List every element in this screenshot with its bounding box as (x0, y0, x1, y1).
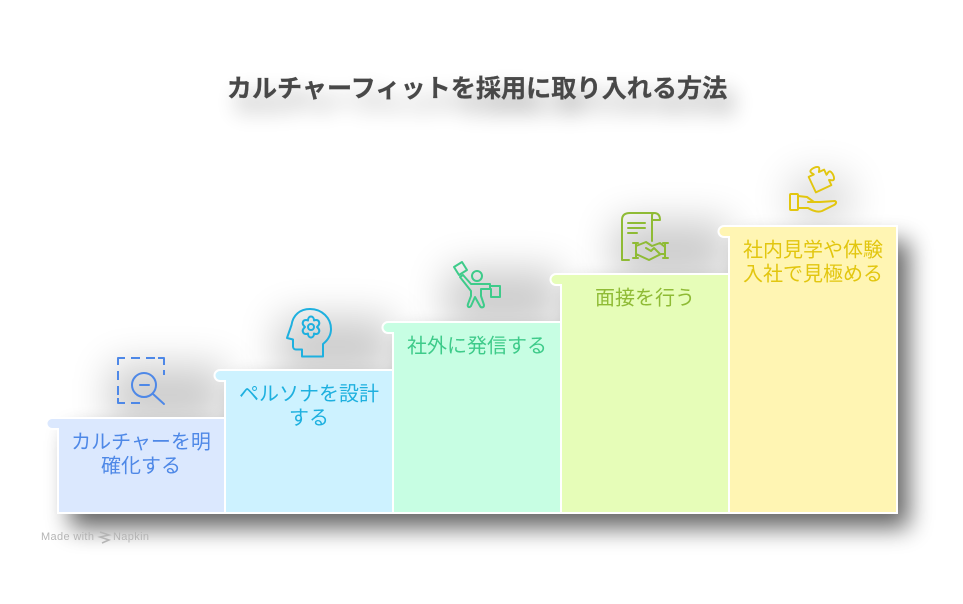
icon: dashed frame with magnifier (118, 358, 164, 404)
step 1 panel (47, 418, 225, 513)
icon: person with papers (454, 262, 500, 307)
step 1 label: 確化する (101, 454, 181, 478)
step 2 label: ペルソナを設計 (239, 382, 379, 406)
step 5 panel (718, 226, 897, 513)
icon: Napkin logo (100, 532, 109, 543)
watermark: Made with Napkin: Made with (41, 531, 94, 543)
icon: head with gear (287, 309, 331, 356)
step 4 panel (550, 274, 729, 513)
icon: contract scroll with handshake (622, 213, 668, 260)
staircase and icon shadows (70, 175, 909, 528)
step 3 panel (382, 322, 561, 513)
icon: hand holding puzzle piece (790, 162, 837, 212)
title: カルチャーフィットを採用に取り入れる方法 (227, 75, 727, 103)
title shadow: カルチャーフィットを採用に取り入れる方法 (234, 89, 734, 117)
step 2 panel (214, 370, 393, 513)
step 5 label: 入社で見極める (743, 262, 883, 286)
step 4 label: 面接を行う (595, 286, 695, 310)
watermark: Made with Napkin (41, 531, 149, 543)
step 3 label: 社外に発信する (407, 334, 547, 358)
step 2 label: する (289, 408, 329, 430)
step 1 label: カルチャーを明 (71, 432, 211, 454)
watermark: Made with Napkin: Napkin (113, 531, 149, 543)
step 5 label: 社内見学や体験 (743, 238, 883, 262)
